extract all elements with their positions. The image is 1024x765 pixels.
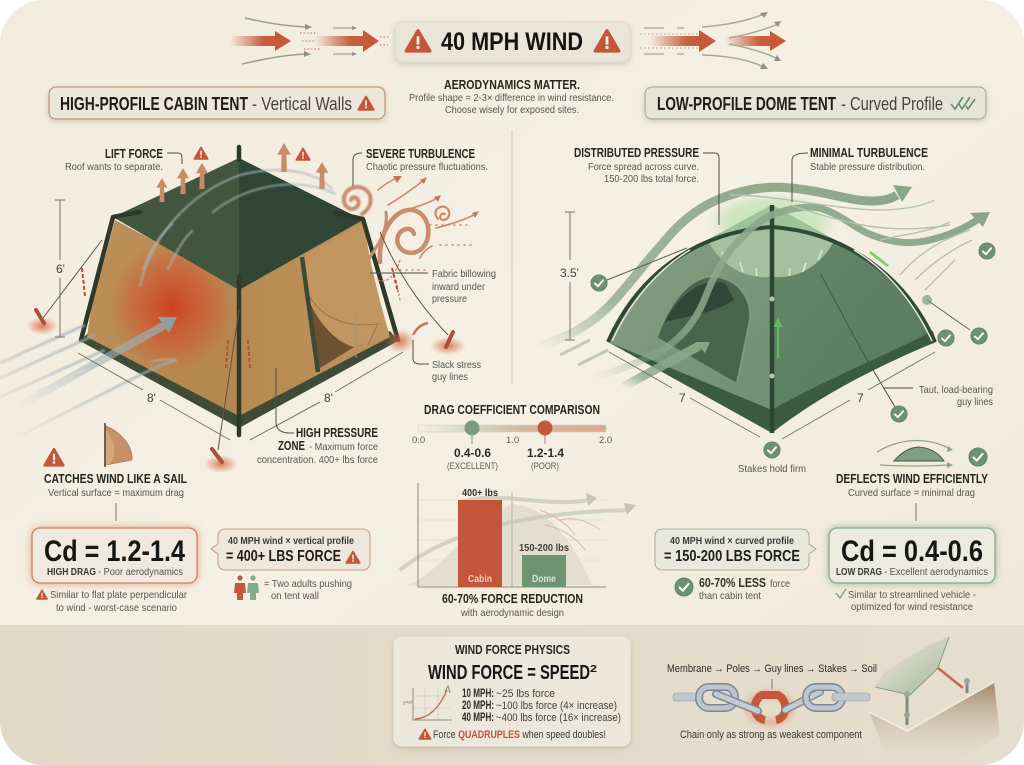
illustration: cabin tent: [0, 143, 479, 473]
stress marks: [82, 268, 398, 368]
force bar chart: 150-200 lbs: [519, 542, 569, 554]
dimension labels: 8': [147, 391, 156, 405]
small turbulence arrowheads: [393, 176, 479, 218]
dome seam: [820, 273, 895, 407]
panel: drag coefficient comparison: 60-70% FORCE REDUCTION: [442, 591, 583, 606]
icon: deflecting dome: [877, 440, 953, 468]
panel: wind force physics: ~25 lbs force: [496, 688, 555, 700]
dome dimension labels: 3.5': [560, 266, 579, 280]
note: flat plate: [37, 589, 187, 614]
callout: cabin force: [211, 529, 370, 570]
callout: fabric billowing: pressure: [432, 293, 467, 305]
roof cap: [707, 205, 835, 240]
guy lines and stakes: [26, 232, 466, 473]
callout: slack guy lines: [432, 359, 481, 383]
note: streamlined: optimized for wind resistance: [851, 601, 973, 613]
scale bar: 0.0: [412, 435, 425, 446]
dome right face: [772, 205, 935, 412]
scale bar: (EXCELLENT): [447, 461, 498, 472]
note: less force: force: [770, 578, 790, 590]
note: less force: [699, 576, 790, 602]
callout: slack guy lines: Slack stress: [432, 359, 481, 371]
panel: cabin Cd: [32, 528, 197, 583]
pressure ticks: [722, 250, 822, 276]
dome floor: [608, 331, 936, 433]
callout: minimal turbulence: MINIMAL TURBULENCE: [810, 146, 928, 160]
note: two adults: = Two adults pushing: [264, 578, 352, 590]
callout: severe turbulence: SEVERE TURBULENCE: [366, 147, 475, 161]
callout: deflects wind: DEFLECTS WIND EFFICIENTLY: [836, 472, 989, 486]
panel: cabin Cd: HIGH DRAG: [47, 566, 96, 578]
check marks on dome: [591, 243, 995, 458]
cabin dimensions: [55, 200, 403, 440]
panel: dome Cd: - Excellent aerodynamics: [884, 566, 988, 578]
heading: cabin tent: [49, 87, 385, 119]
panel: drag coefficient comparison: [400, 403, 636, 619]
panel: wind force physics: 10 MPH:: [462, 688, 494, 700]
wind ribbons over dome: [537, 185, 990, 387]
wind arrows right: [640, 12, 786, 69]
dome guy lines: [607, 248, 970, 330]
note: flat plate: Similar to flat plate perpendicular: [50, 589, 187, 601]
dimension labels: [56, 262, 333, 405]
chain illustration: [673, 687, 870, 722]
callout: dome force: [655, 529, 816, 570]
panel: wind force physics: WIND FORCE = SPEED: [428, 662, 590, 684]
callout: minimal turbulence: [810, 146, 928, 173]
title: 40 MPH wind: [395, 22, 630, 62]
callout: taut guy lines: [919, 384, 993, 408]
callout: high pressure zone: concentration. 400+ lbs force: [257, 454, 378, 466]
callout: dome force: 40 MPH wind × curved profile: [670, 535, 794, 547]
dome door: [657, 276, 750, 383]
scale bar: (POOR): [531, 461, 559, 472]
title: 40 MPH wind: 40 MPH WIND: [441, 28, 583, 56]
force bar chart: [400, 483, 636, 587]
pressure lens patch: [707, 231, 835, 277]
callout: catches wind: Vertical surface = maximum drag: [48, 487, 184, 499]
panel: wind force physics: ~100 lbs force (4× increase): [496, 700, 617, 712]
callout: deflects wind: [836, 472, 989, 499]
dimension labels: 6': [56, 262, 65, 276]
icon: two adults: [234, 575, 259, 600]
cabin poles: [81, 147, 398, 435]
callout: taut guy lines: guy lines: [957, 396, 993, 408]
callout: high pressure zone: ZONE: [278, 439, 305, 453]
intro text: aerodynamics matter: AERODYNAMICS MATTER.: [444, 78, 580, 92]
scale bar: 0.4-0.6: [454, 446, 491, 460]
note: two adults: on tent wall: [271, 590, 319, 602]
force bar chart: 400+ lbs: [462, 487, 498, 499]
icon: warning sail: [45, 449, 63, 465]
dome left face: [608, 205, 772, 412]
callout: distributed pressure: [574, 146, 699, 185]
heading: cabin tent: HIGH-PROFILE CABIN TENT: [60, 94, 248, 114]
callout: cabin force: = 400+ LBS FORCE: [226, 548, 341, 565]
force bar chart: Cabin: [468, 573, 492, 585]
cabin floor: [80, 331, 398, 428]
cabin door flap: [302, 223, 390, 347]
wind streaks on cabin: [0, 170, 336, 437]
intro text: aerodynamics matter: Profile shape = 2-3× difference in wind resistance.: [409, 92, 614, 104]
heading: dome tent: [645, 87, 986, 119]
callout: distributed pressure: DISTRIBUTED PRESSURE: [574, 146, 699, 160]
panel: wind force physics: 2: [590, 664, 598, 675]
heading: cabin tent: - Vertical Walls: [252, 94, 352, 114]
panel: wind force physics: 40 MPH:: [462, 712, 494, 724]
callout: taut guy lines: Taut, load-bearing: [919, 384, 993, 396]
callout: distributed pressure: 150-200 lbs total force.: [604, 173, 699, 185]
callout: fabric billowing: [432, 268, 496, 305]
scale bar: 1.0: [506, 435, 519, 446]
callout: fabric billowing: Fabric billowing: [432, 268, 496, 280]
icon: less force check: [675, 578, 693, 596]
dome dimension labels: [560, 266, 864, 405]
callout: severe turbulence: [366, 147, 488, 173]
high pressure hot zone: [110, 241, 234, 373]
force bar chart: Dome: [532, 573, 556, 585]
note: streamlined: [836, 589, 976, 613]
big wind arrow: [17, 317, 177, 407]
turbulence swirls: [344, 178, 476, 300]
callout: fabric billowing: inward under: [432, 281, 485, 293]
note: less force: than cabin tent: [699, 590, 761, 602]
callout: lift force: [65, 147, 163, 173]
panel: dome Cd: [829, 528, 995, 583]
intro text: aerodynamics matter: Choose wisely for exposed sites.: [445, 104, 579, 116]
panel: wind force physics: [394, 637, 630, 746]
callout: lift force: LIFT FORCE: [105, 147, 163, 161]
divider: [511, 130, 513, 385]
panel: dome Cd: Cd = 0.4-0.6: [841, 535, 983, 568]
illustration: dome tent: [537, 185, 995, 458]
callout: catches wind: [44, 472, 187, 499]
callout: severe turbulence: Chaotic pressure fluctuations.: [366, 161, 488, 173]
panel: dome Cd: LOW DRAG: [836, 566, 882, 578]
callout: high pressure zone: - Maximum force: [309, 441, 378, 453]
callout: catches wind: CATCHES WIND LIKE A SAIL: [44, 472, 187, 486]
warning icons above roof: [194, 148, 310, 160]
callout: slack guy lines: guy lines: [432, 371, 468, 383]
panel: cabin Cd: - Poor aerodynamics: [98, 566, 183, 578]
scale bar: 2.0: [599, 435, 612, 446]
callout: high pressure zone: [257, 426, 378, 466]
cabin right wall: [239, 218, 390, 416]
callout: deflects wind: Curved surface = minimal drag: [848, 487, 975, 499]
callout: stakes: Stakes hold firm: [738, 463, 806, 475]
callout: high pressure zone: HIGH PRESSURE: [296, 426, 378, 440]
callout: distributed pressure: Force spread across curve.: [588, 161, 699, 173]
chain caption: Chain only as strong as weakest component: [680, 729, 862, 741]
note: two adults: [264, 578, 352, 602]
heading: dome tent: LOW-PROFILE DOME TENT: [657, 94, 836, 114]
panel: drag coefficient comparison: DRAG COEFFICIENT COMPARISON: [424, 403, 600, 417]
dome dimensions: [565, 212, 935, 439]
heading: dome tent: - Curved Profile: [841, 94, 943, 114]
callout: lift force: Roof wants to separate.: [65, 161, 163, 173]
panel: wind force physics: ~400 lbs force (16× increase): [496, 712, 621, 724]
pressure glow above arc: [706, 192, 838, 252]
label leaders: dome: [703, 153, 913, 388]
mini graph: y=x²: [403, 700, 413, 706]
icon: check: [969, 448, 987, 466]
dome dimension labels: 7: [857, 391, 864, 405]
label leaders: cabin: [167, 153, 429, 433]
panel: cabin Cd: Cd = 1.2-1.4: [44, 535, 185, 568]
callout: minimal turbulence: Stable pressure distribution.: [810, 161, 925, 173]
panel: wind force physics: Force QUADRUPLES when speed doubles!: [433, 729, 606, 741]
dimension labels: 8': [324, 391, 333, 405]
icon: sail: [105, 423, 132, 467]
lift arrows: [156, 143, 328, 202]
dome poles: [608, 227, 935, 342]
intro text: aerodynamics matter: [409, 78, 614, 116]
note: less force: 60-70% LESS: [699, 576, 766, 590]
illustration: stake in ground: [869, 637, 1000, 765]
callout: dome force: = 150-200 LBS FORCE: [664, 548, 800, 565]
note: streamlined: Similar to streamlined vehicle -: [848, 589, 976, 601]
cabin left wall: [87, 220, 239, 416]
bottom band: [0, 625, 1024, 765]
wind arrows left: [230, 18, 390, 64]
dome dimension labels: 7: [679, 391, 686, 405]
callout: cabin force: 40 MPH wind × vertical profile: [228, 535, 354, 547]
scale bar: 1.2-1.4: [527, 446, 564, 460]
panel: wind force physics: WIND FORCE PHYSICS: [455, 643, 570, 657]
panel: wind force physics: 20 MPH:: [462, 700, 494, 712]
note: flat plate: to wind - worst-case scenario: [56, 602, 177, 614]
cabin door opening: [304, 288, 354, 370]
scale bar: [412, 420, 612, 472]
chain sequence label: Membrane → Poles → Guy lines → Stakes → Soil: [667, 663, 877, 675]
panel: drag coefficient comparison: with aerodynamic design: [460, 607, 564, 619]
mini graph: [403, 686, 452, 720]
cabin roof: [113, 158, 239, 290]
